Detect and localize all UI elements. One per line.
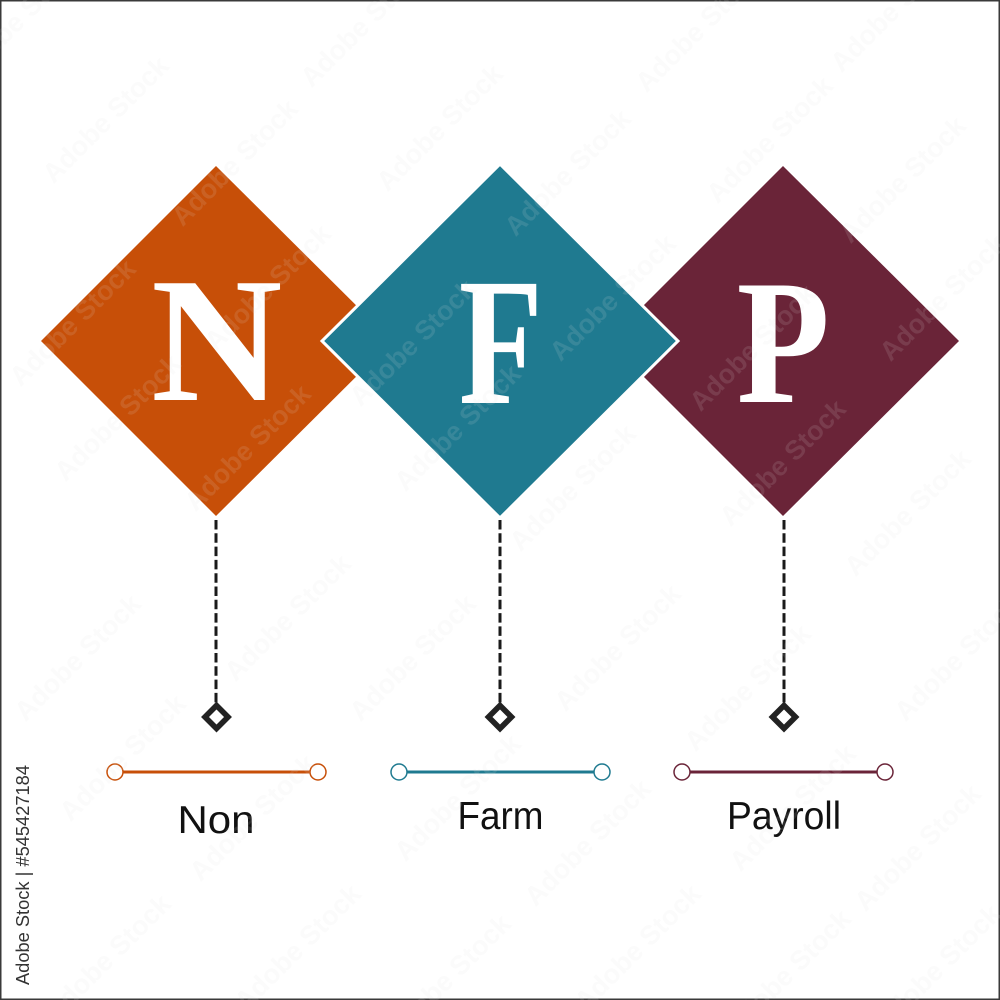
watermark: Adobe Stock (519, 773, 657, 912)
label Non: Non (178, 799, 254, 842)
connector F (488, 520, 512, 728)
watermark: Adobe Stock (499, 103, 637, 242)
watermark: Adobe Stock (839, 443, 977, 582)
watermark: Adobe Stock (344, 273, 482, 412)
diamond N (41, 166, 392, 516)
watermark: Adobe Stock (199, 218, 337, 357)
connector N (205, 520, 228, 728)
stock id: Adobe Stock | #545427184 (13, 765, 33, 985)
connector P (772, 520, 796, 728)
letter P: P (737, 243, 830, 441)
letter F: F (459, 241, 543, 442)
watermark: Adobe Stock (49, 348, 187, 487)
watermark: Adobe Stock (184, 748, 322, 887)
watermark: Adobe Stock (4, 253, 142, 392)
label Payroll: Payroll (727, 795, 841, 838)
watermark: Adobe Stock (344, 588, 482, 727)
letter N: N (151, 241, 282, 439)
watermark: Adobe Stock (724, 738, 862, 877)
watermark: Adobe Stock (834, 110, 972, 249)
watermark: Adobe Stock (714, 393, 852, 532)
watermark: Adobe Stock (684, 278, 822, 417)
watermark: Adobe Stock (371, 58, 509, 197)
rule P (674, 764, 893, 780)
watermark: Adobe Stock (849, 778, 987, 917)
watermark: Adobe Stock (389, 358, 527, 497)
watermark: Adobe Stock (179, 378, 317, 517)
watermark: Adobe Stock (389, 728, 527, 867)
rule F (391, 764, 610, 780)
watermark: Adobe Stock (166, 93, 304, 232)
watermark: Adobe Stock (54, 688, 192, 827)
rule N (107, 764, 326, 780)
watermark: Adobe Stock (37, 50, 175, 189)
label Farm: Farm (458, 795, 544, 838)
watermark: Adobe Stock (549, 578, 687, 717)
diamond P (608, 166, 959, 516)
watermark: Adobe Stock (544, 228, 682, 367)
watermark: Adobe Stock (701, 70, 839, 209)
watermark: Adobe Stock (219, 548, 357, 687)
watermark: Adobe Stock (9, 588, 147, 727)
watermark: Adobe Stock (679, 618, 817, 757)
watermark: Adobe Stock (504, 418, 642, 557)
diamond F (322, 164, 678, 518)
